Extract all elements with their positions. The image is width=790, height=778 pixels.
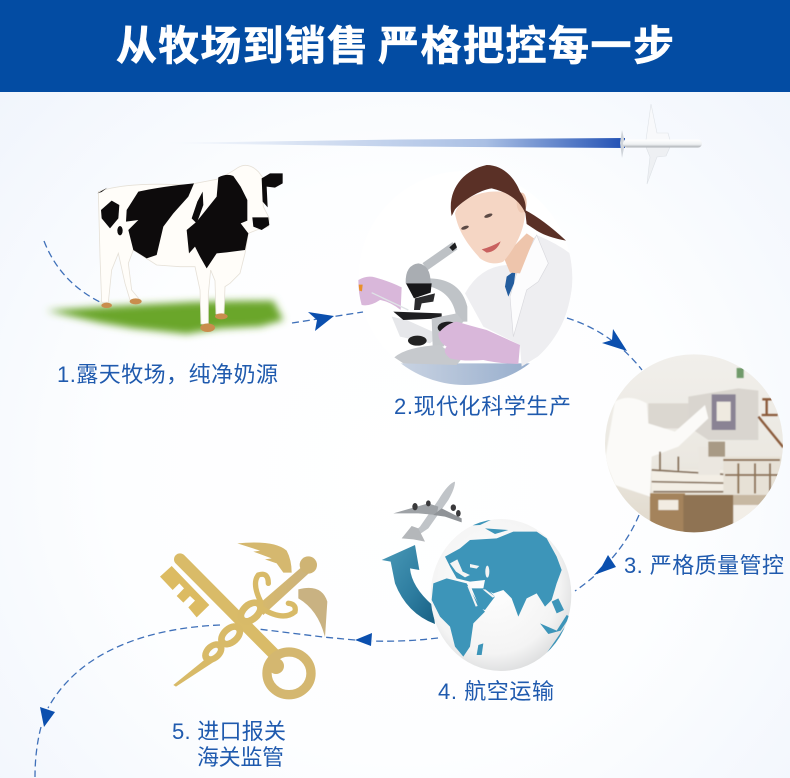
continents — [432, 520, 570, 657]
ear — [517, 193, 527, 213]
cow hooves — [101, 298, 228, 332]
worker in white suit — [605, 398, 708, 497]
face — [455, 191, 525, 263]
microscope — [393, 242, 467, 365]
neck — [503, 233, 534, 273]
step 5 label: 海关监管 — [197, 745, 284, 770]
grass patch — [47, 301, 283, 334]
green sign — [737, 368, 744, 378]
wall panel — [648, 403, 690, 428]
entwined snake rings — [198, 594, 269, 667]
pipette — [359, 285, 408, 310]
brown lower machinery — [649, 492, 766, 532]
blue shirt — [505, 270, 516, 297]
step 4: globe, plane and curved arrow — [382, 482, 571, 671]
snake heads — [255, 574, 295, 616]
step 5 label: 5. 进口报关 — [172, 719, 286, 744]
dashed route arrows — [35, 241, 642, 777]
lab coat — [392, 235, 573, 367]
globe sphere — [431, 519, 571, 671]
header band — [0, 0, 790, 92]
conveyor — [652, 442, 782, 493]
factory circle — [605, 354, 783, 532]
step 3: quality control factory photo — [605, 354, 783, 535]
cow black patches — [97, 173, 283, 268]
caduceus — [173, 543, 327, 687]
curved teal arrow — [382, 545, 435, 624]
brown bracket — [758, 399, 783, 447]
title: 严格把控每一步 — [378, 23, 674, 69]
wings — [237, 543, 327, 637]
hair and ponytail — [451, 165, 566, 241]
key — [160, 559, 311, 695]
title — [116, 23, 674, 69]
step 1 label: 1.露天牧场，纯净奶源 — [57, 362, 278, 387]
step 3 label: 3. 严格质量管控 — [624, 553, 784, 578]
airplane with blue trail — [160, 104, 702, 184]
lab desk — [401, 363, 530, 385]
step 2 label: 2.现代化科学生产 — [394, 394, 571, 419]
step 1: cow on grass — [47, 165, 283, 334]
inland seas — [450, 559, 495, 607]
step 2: scientist with microscope — [358, 165, 573, 390]
step 5 label — [172, 719, 286, 770]
step 4 label: 4. 航空运输 — [438, 679, 554, 704]
title: 从牧场到销售 — [116, 23, 368, 69]
facial features — [461, 213, 501, 253]
pink gloves — [358, 277, 520, 364]
white circle backdrop — [358, 171, 572, 385]
cow body — [98, 165, 269, 324]
step 5: customs key and caduceus emblem — [160, 543, 327, 695]
small airplane — [393, 482, 462, 542]
inspection machine — [688, 388, 758, 440]
